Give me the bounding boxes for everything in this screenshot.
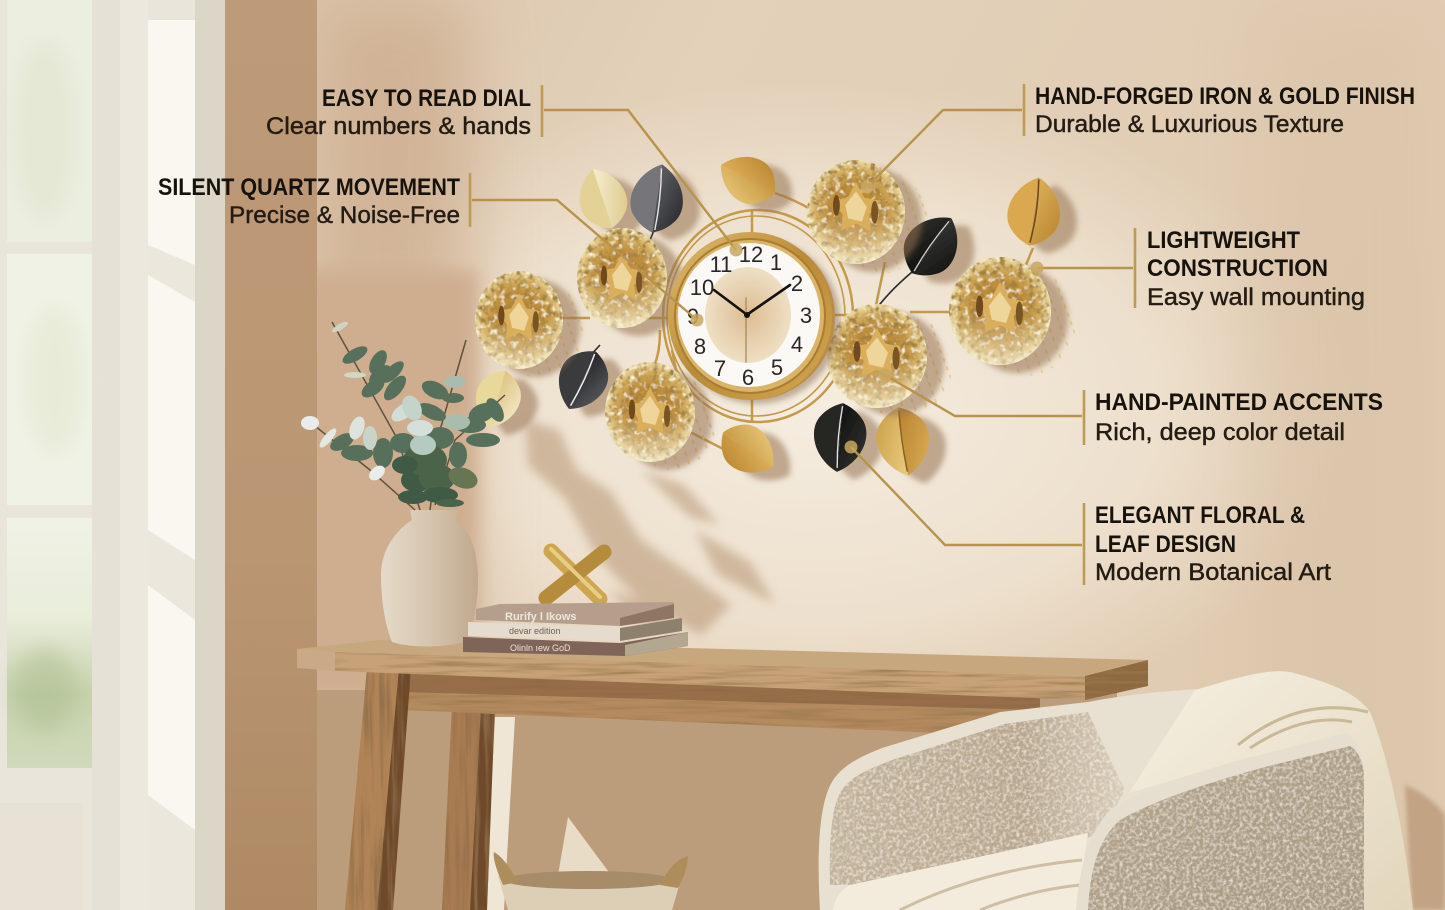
numerals: 5 [771,355,783,380]
leaf: gold far right [1003,174,1065,249]
callout: hand-painted accents: HAND-PAINTED ACCENTS [1095,389,1383,416]
numerals: 6 [742,365,754,390]
stack of books [463,602,688,656]
armchair [819,671,1413,910]
flower star centres [498,182,1024,434]
vase with eucalyptus [301,320,508,646]
callout: elegant floral and leaf design: Modern Botanical Art [1095,559,1331,586]
chair arm rim [1076,733,1364,910]
vase [381,510,478,646]
centre disc [705,267,791,363]
callout: silent quartz movement: Precise & Noise-Free [229,202,460,229]
flower discs [475,160,1051,462]
leaf: black bottom [811,401,869,474]
stack of books: Rurify l Ikows [505,611,577,623]
chair back fabric [830,712,1125,885]
basket [494,852,688,910]
callout: hand-painted accents: Rich, deep color detail [1095,419,1345,446]
chair back rim [819,689,1300,910]
flowers [475,160,1051,462]
leaf: charcoal top [626,161,688,236]
leaf: pale lower left [469,365,527,433]
numerals: 4 [791,332,803,357]
corner wall [225,0,317,910]
wall shadows of plant [525,420,775,635]
eucalyptus leaves [301,320,508,507]
wire stems [560,193,1033,455]
numerals: 11 [710,252,732,277]
callout: silent quartz movement: SILENT QUARTZ MOVEMENT [158,174,460,201]
clock wall art [469,145,1076,486]
callout: hand-forged iron and gold finish [860,83,1415,194]
blanket over back [1129,671,1413,910]
book top [476,602,674,626]
numerals: 8 [694,334,706,359]
window pane lower [7,518,92,768]
callout: elegant floral and leaf design: ELEGANT FLORAL & [1095,502,1305,529]
table top [297,640,1148,676]
callout: hand-painted accents [878,368,1383,446]
chair cast shadow [1405,785,1445,910]
callout: easy to read dial [266,85,742,256]
callout: lightweight construction: Easy wall mounting [1147,284,1365,311]
leaf: black right [891,203,972,288]
chair arm fabric [1088,746,1364,910]
callout: elegant floral and leaf design: LEAF DESIGN [1095,531,1236,558]
flower highlights [475,160,1051,462]
numerals: 1 [770,250,782,275]
callout: hand-forged iron and gold finish: Durable & Luxurious Texture [1035,111,1344,138]
leaf: pale gold top left [571,162,635,236]
numerals: 12 [739,242,763,267]
lower blanket [833,833,1088,910]
leaf: gold top centre [710,145,785,214]
clock face [678,243,820,387]
window pane upper [7,0,92,242]
hands [714,285,790,362]
eucalyptus stems [305,322,505,510]
table rear leg [442,705,495,910]
callout: lightweight construction: LIGHTWEIGHT [1147,227,1300,254]
callout: easy to read dial: Clear numbers & hands [266,113,531,140]
numerals: 9 [687,304,699,329]
leaf: gold lower centre [710,413,786,486]
table [297,640,1148,910]
numerals: 2 [791,271,803,296]
window pane middle [7,254,92,505]
numerals: 3 [800,303,812,328]
leaves [469,145,1065,486]
table apron [404,668,1040,734]
window frame [0,0,225,910]
numerals: 10 [690,275,714,300]
leaf: charcoal lower left [547,341,618,419]
book bottom [463,632,688,656]
stack of books: devar edition [509,626,561,636]
perforated flower shadows [496,170,1076,470]
gold X sculpture [546,549,604,599]
callout: easy to read dial: EASY TO READ DIAL [322,85,531,112]
numerals [687,242,812,390]
leaf: gold bottom [872,404,934,479]
callout: silent quartz movement [158,173,704,326]
numerals: 7 [714,356,726,381]
table front leg [345,668,411,910]
callout: lightweight construction [1030,227,1365,311]
stack of books: Olinln ıew GoD [510,643,571,653]
callout: elegant floral and leaf design [844,440,1331,586]
clock [668,232,835,400]
callout: lightweight construction: CONSTRUCTION [1147,255,1328,282]
book middle [468,618,682,641]
